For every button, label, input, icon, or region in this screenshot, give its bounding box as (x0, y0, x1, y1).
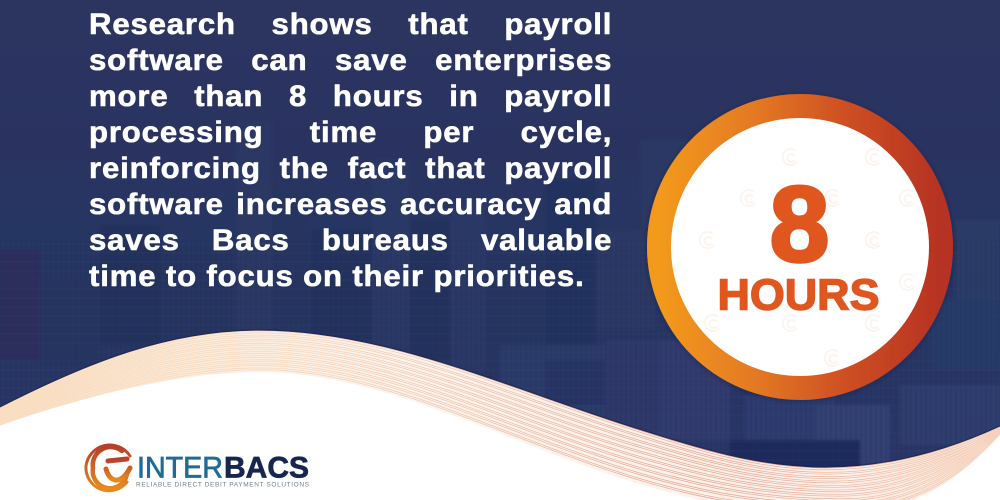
body paragraph: software can save enterprises (89, 44, 612, 77)
ring (659, 106, 941, 388)
body paragraph: more than 8 hours in payroll (89, 80, 612, 113)
body paragraph: Research shows that payroll (89, 8, 612, 41)
wordmark: INTER (137, 452, 223, 484)
body paragraph: saves Bacs bureaus valuable (89, 224, 612, 257)
logo: Interbacs: BACS (224, 452, 309, 484)
body paragraph: software increases accuracy and (89, 188, 612, 221)
body paragraph: time to focus on their priorities. (89, 260, 585, 293)
label HOURS: HOURS (718, 270, 880, 320)
icon: phoenix swirl (86, 445, 130, 491)
tagline: RELIABLE DIRECT DEBIT PAYMENT SOLUTIONS (136, 482, 310, 488)
body paragraph: processing time per cycle, (89, 116, 612, 149)
number 8: 8 (770, 164, 829, 284)
watermark logo pattern (700, 149, 914, 366)
body paragraph: reinforcing the fact that payroll (89, 152, 612, 185)
body paragraph (89, 8, 612, 293)
